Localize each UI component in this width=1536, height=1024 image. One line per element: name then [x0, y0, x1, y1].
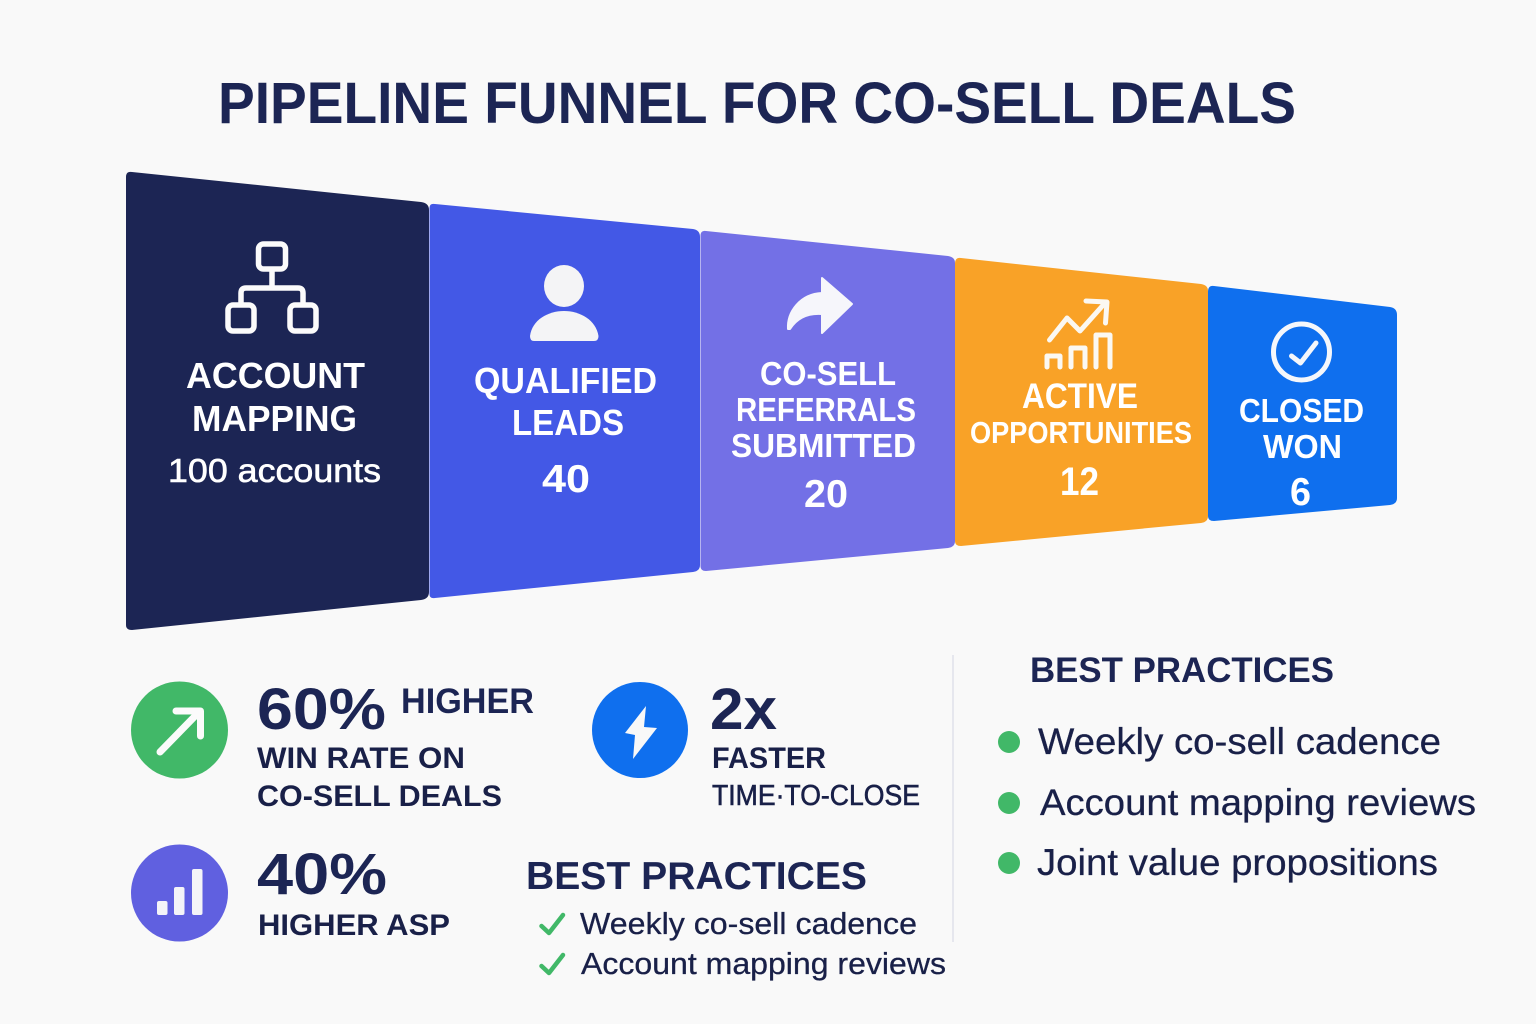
label: account mapping: MAPPING [192, 398, 357, 439]
best practices: bullet list [998, 651, 1476, 883]
label: co-sell referrals submitted: REFERRALS [736, 391, 916, 428]
item: account mapping: Account mapping reviews [1040, 782, 1476, 823]
stat: 2x faster [592, 677, 920, 812]
panel: account mapping [126, 172, 429, 630]
label: qualified leads [474, 360, 657, 443]
value: 6: 6 [1290, 471, 1311, 514]
label: co-sell referrals submitted: CO-SELL [760, 355, 896, 392]
label: closed won: WON [1263, 428, 1342, 465]
label: co-sell referrals submitted [731, 355, 916, 464]
label: active opportunities: OPPORTUNITIES [970, 415, 1192, 450]
stat text: WIN RATE ON [257, 742, 465, 775]
value: 40%: 40% [257, 842, 387, 907]
title: PIPELINE FUNNEL FOR CO-SELL DEALS [218, 71, 1296, 136]
label: qualified leads: LEADS [512, 402, 624, 443]
label: active opportunities [970, 377, 1192, 450]
icon: bar signal [131, 844, 228, 942]
icon: person [530, 265, 598, 341]
heading: BEST PRACTICES [526, 855, 867, 898]
stat text: CO-SELL DEALS [257, 780, 502, 813]
value: 100 accounts: 100 accounts [168, 452, 381, 489]
icon: green arrow [131, 682, 228, 778]
stat text: HIGHER ASP [258, 909, 450, 942]
label: account mapping: ACCOUNT [186, 355, 365, 396]
panel: co-sell referrals submitted [700, 231, 955, 571]
value: 12: 12 [1060, 460, 1099, 504]
icon: hierarchy [228, 244, 316, 331]
heading: BEST PRACTICES [1030, 651, 1334, 690]
value: 40: 40 [542, 458, 590, 501]
icon: check circle [1274, 324, 1330, 380]
label: account mapping [186, 355, 365, 439]
value: 20: 20 [804, 473, 848, 516]
label: closed won [1239, 392, 1364, 465]
stat: 60% higher win rate [131, 677, 534, 813]
icon: share arrow [788, 278, 852, 333]
label: active opportunities: ACTIVE [1022, 377, 1138, 416]
icon: growth chart [1047, 301, 1110, 367]
stat text [257, 682, 534, 813]
panel: qualified leads [430, 204, 700, 598]
stat text: HIGHER [401, 682, 534, 721]
icon: lightning bolt [592, 682, 688, 778]
item: weekly cadence: Weekly co-sell cadence [580, 906, 917, 941]
item: weekly cadence: Weekly co-sell cadence [1038, 721, 1441, 762]
value: 60%: 60% [257, 677, 386, 742]
panel: active opportunities [955, 258, 1208, 546]
value: 2x: 2x [710, 677, 777, 742]
item: account mapping: Account mapping reviews [581, 946, 946, 981]
stat: 40% higher asp [131, 842, 450, 942]
best practices: checklist [526, 855, 946, 981]
item: joint value: Joint value propositions [1037, 842, 1438, 883]
label: closed won: CLOSED [1239, 392, 1364, 429]
stat text: TIME·TO-CLOSE [712, 780, 920, 812]
label: co-sell referrals submitted: SUBMITTED [731, 427, 916, 464]
stat text [712, 742, 920, 812]
panel: closed won [1208, 286, 1397, 521]
label: qualified leads: QUALIFIED [474, 360, 657, 401]
stat text: FASTER [712, 742, 826, 775]
